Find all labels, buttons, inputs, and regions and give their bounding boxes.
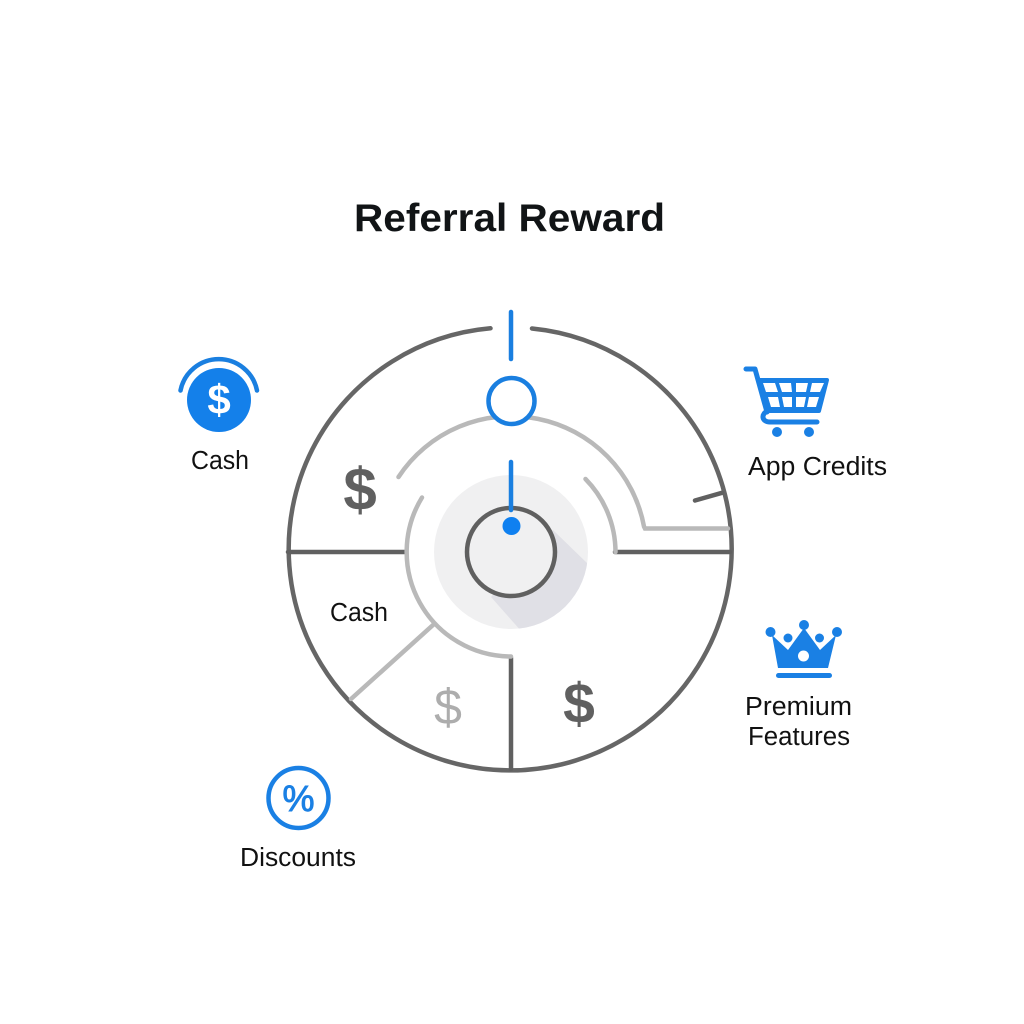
icon: percent discount	[268, 768, 328, 828]
outer ring	[289, 328, 732, 770]
icon: cash coin	[180, 359, 257, 432]
title: Referral Reward	[354, 197, 665, 240]
label: Premium Features	[745, 693, 852, 751]
icon: shopping cart	[746, 369, 827, 437]
dollar sign: lower sector light: $	[434, 679, 462, 735]
label: Discounts: Discounts	[240, 844, 356, 872]
label: Premium Features: Premium	[745, 693, 852, 721]
dollar sign: lower right sector: $	[563, 672, 595, 736]
center hub with shadow	[434, 475, 590, 632]
label: Cash: Cash	[191, 447, 249, 475]
light grey arcs and channels	[351, 416, 728, 699]
label: App Credits: App Credits	[748, 453, 887, 481]
icon: percent discount: %	[282, 778, 315, 819]
wheel label: Cash: Cash	[330, 599, 388, 627]
center blue pointer	[502, 462, 520, 535]
dollar sign: upper left sector: $	[343, 456, 377, 523]
icon: crown	[766, 620, 842, 678]
top blue marker with ring	[488, 312, 534, 424]
icon: cash coin: $	[207, 376, 231, 423]
radial wheel diagram	[288, 312, 732, 770]
label: Premium Features: Features	[748, 723, 850, 751]
dark dividers	[288, 493, 730, 769]
